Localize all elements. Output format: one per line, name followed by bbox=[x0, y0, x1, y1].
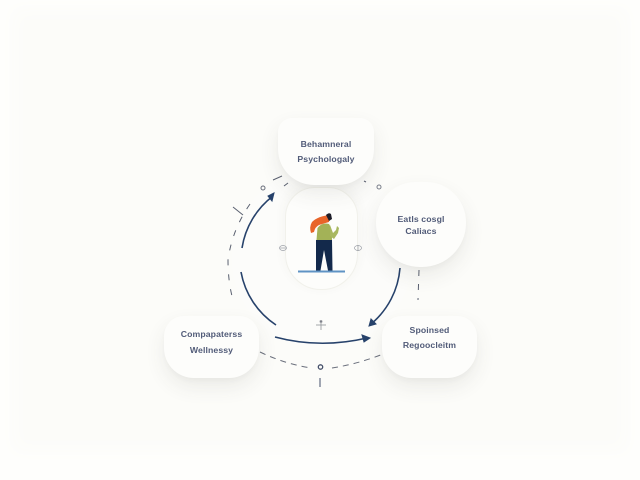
head bbox=[326, 213, 332, 221]
panel: left card bbox=[164, 316, 259, 378]
icon: small person marker bbox=[316, 320, 326, 330]
hair bbox=[310, 215, 330, 233]
panel: bottom right card: Regoocleitm bbox=[403, 340, 456, 350]
icon: left small glyph bbox=[280, 246, 286, 250]
inner glow circle bbox=[232, 168, 412, 348]
panel: top card: Behamneral bbox=[301, 139, 351, 149]
icon: bottom marker bbox=[318, 365, 323, 369]
arm bbox=[330, 225, 339, 239]
panel: bottom right card bbox=[382, 316, 477, 378]
arrow: right arc downward bbox=[369, 268, 400, 326]
outer dashed ring bottom bbox=[260, 352, 383, 368]
panel: top card: Psychologaly bbox=[297, 154, 355, 164]
outer dashed ring right bbox=[418, 270, 419, 300]
panel: left card: Compapaterss bbox=[181, 329, 242, 339]
icon: right small glyph bbox=[354, 245, 362, 251]
tick marks bbox=[233, 176, 366, 387]
figure: person bbox=[310, 213, 339, 270]
icon: top left ring bbox=[261, 186, 265, 190]
panel: left card: Wellnessy bbox=[190, 345, 233, 355]
panel: right card bbox=[376, 182, 466, 267]
panel: top card bbox=[278, 118, 374, 185]
floor line bbox=[298, 270, 345, 272]
panel: right card: Caliacs bbox=[405, 226, 437, 236]
arrow: left arc upward bbox=[242, 193, 274, 248]
legs bbox=[316, 240, 332, 270]
outer dashed ring left bbox=[228, 204, 250, 300]
panel: bottom right card: Spoinsed bbox=[410, 325, 449, 335]
panel: center figure capsule bbox=[285, 187, 358, 290]
panel: right card: Eatls cosgl bbox=[398, 214, 444, 224]
arrow: left arc lower bbox=[241, 272, 276, 325]
torso bbox=[316, 224, 332, 240]
icon: top right glyph bbox=[377, 185, 381, 189]
arrow: bottom arc bbox=[275, 335, 370, 343]
